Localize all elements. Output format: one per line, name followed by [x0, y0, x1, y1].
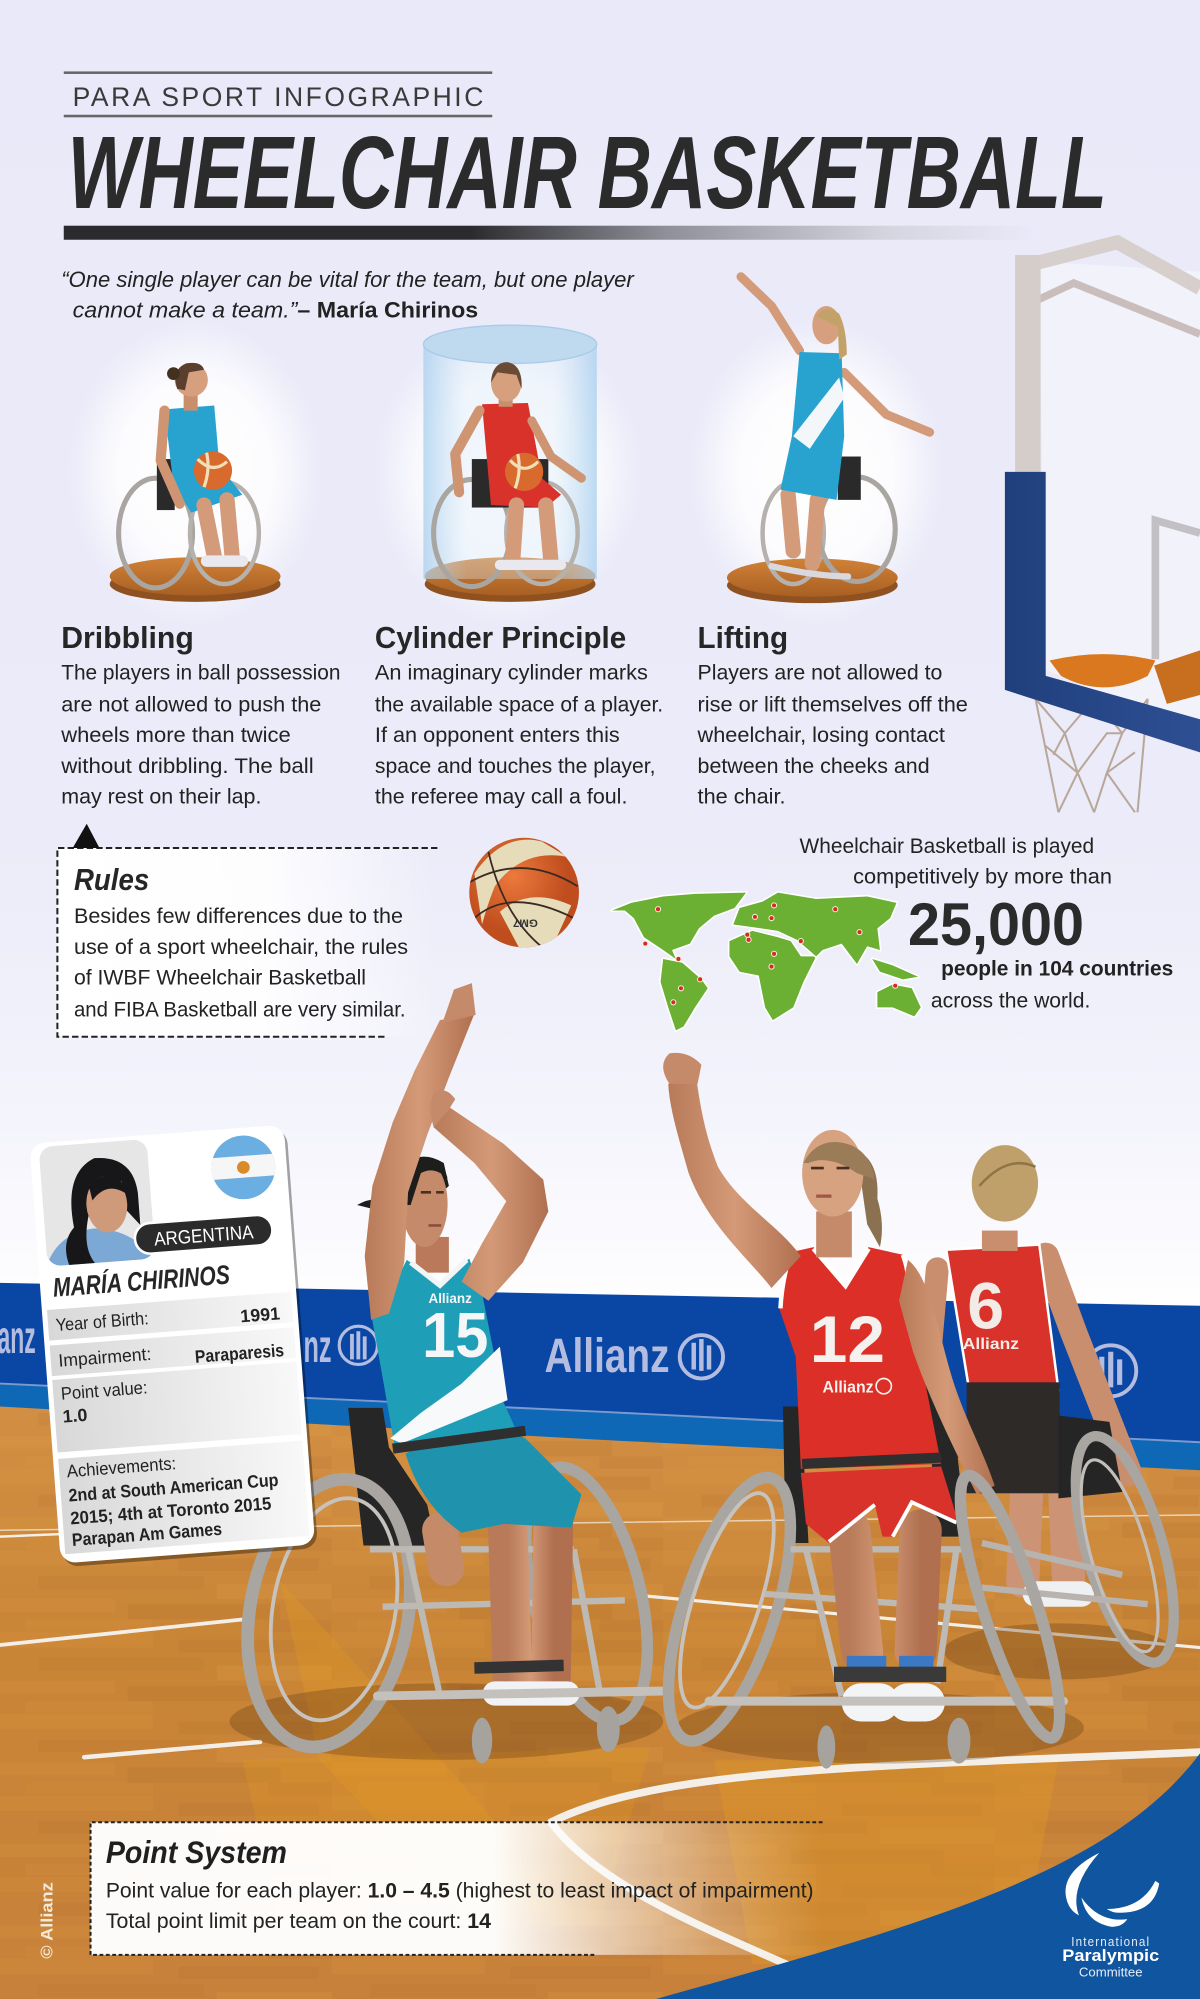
- player 12 red: Allianz: [823, 1378, 874, 1397]
- sponsor banner: Allianz: [545, 1329, 670, 1383]
- player 6 back view: 6: [967, 1270, 1004, 1344]
- profile rows: 1991: [240, 1303, 281, 1326]
- logo: International Paralympic Committee: International: [1071, 1934, 1150, 1949]
- player 15 teal: Allianz: [428, 1290, 472, 1306]
- statistics callout: [800, 833, 1173, 1012]
- quote: [61, 267, 635, 323]
- profile rows: Parapan Am Games: [71, 1519, 223, 1550]
- player 15 teal: [228, 983, 670, 1764]
- player 12 red: [643, 1053, 1084, 1769]
- heading: dribbling: Dribbling: [61, 621, 194, 655]
- logo: International Paralympic Committee: Committee: [1079, 1965, 1143, 1980]
- text: lifting: wheelchair, losing contact: [697, 722, 945, 747]
- basketball hoop and backboard: [1005, 242, 1200, 812]
- figure: dribbling player: [68, 319, 323, 625]
- profile rows: Point value:: [60, 1377, 148, 1404]
- player 6 back view: [928, 1145, 1194, 1679]
- text: dribbling: are not allowed to push the: [61, 692, 321, 717]
- profile rows: 1.0: [62, 1405, 88, 1427]
- player 6 back view: Allianz: [963, 1336, 1019, 1353]
- athlete photo: [40, 1140, 153, 1266]
- card: athlete profile: [29, 1125, 318, 1567]
- panel: rules: of IWBF Wheelchair Basketball: [74, 964, 366, 989]
- figure: lifting player: [689, 277, 944, 625]
- text: lifting: the chair.: [698, 783, 786, 808]
- statistics callout: competitively by more than: [853, 864, 1112, 889]
- profile rows: Achievements:: [66, 1453, 177, 1481]
- figure: cylinder player: [374, 319, 641, 625]
- panel: rules: use of a sport wheelchair, the rules: [74, 934, 408, 959]
- country pill: [134, 1214, 273, 1255]
- text: cylinder principle: the available space of a player.: [375, 692, 663, 717]
- profile rows: [47, 1292, 309, 1554]
- text: cylinder principle: the referee may call a foul.: [375, 783, 627, 808]
- text: dribbling: wheels more than twice: [60, 722, 291, 747]
- text: dribbling: without dribbling. The ball: [60, 753, 314, 778]
- country pill: ARGENTINA: [153, 1222, 254, 1251]
- copyright: © Allianz: [37, 1882, 56, 1959]
- text: dribbling: The players in ball possession: [61, 660, 340, 685]
- profile rows: 2nd at South American Cup: [68, 1470, 279, 1505]
- profile rows: 2015; 4th at Toronto 2015: [70, 1493, 272, 1528]
- panel: rules: Rules: [74, 863, 149, 897]
- statistics callout: across the world.: [931, 987, 1090, 1012]
- player 12 red: 12: [810, 1303, 885, 1377]
- logo: International Paralympic Committee: [1062, 1853, 1159, 1980]
- text: cylinder principle: [375, 660, 663, 808]
- statistics callout: Wheelchair Basketball is played: [800, 833, 1094, 858]
- profile rows: Paraparesis: [194, 1340, 285, 1367]
- panel: rules: [57, 824, 437, 1037]
- sponsor banner: [0, 1283, 1200, 1470]
- logo: International Paralympic Committee: Paralympic: [1062, 1946, 1159, 1965]
- sponsor banner: nz: [304, 1320, 332, 1372]
- text: lifting: rise or lift themselves off the: [698, 692, 968, 717]
- text: dribbling: [60, 660, 340, 808]
- heading: lifting: Lifting: [698, 621, 788, 655]
- panel: point system: Point System: [106, 1834, 287, 1870]
- icon: basketball: [469, 838, 579, 950]
- panel: point system: [91, 1822, 823, 1955]
- quote: “One single player can be vital for the team, but one player: [61, 267, 635, 292]
- text: lifting: [697, 660, 968, 808]
- quote: cannot make a team.” – María Chirinos: [73, 298, 478, 323]
- text: lifting: between the cheeks and: [698, 753, 930, 778]
- blue corner: [654, 1753, 1200, 1999]
- court floor: [0, 1403, 1200, 1999]
- panel: point system: Total point limit per team on the court: 14: [106, 1908, 491, 1933]
- text: cylinder principle: If an opponent enters this: [375, 722, 620, 747]
- flag: Argentina: [212, 1136, 276, 1200]
- statistics callout: 25,000: [908, 891, 1084, 958]
- panel: rules: and FIBA Basketball are very similar.: [74, 996, 406, 1021]
- heading: cylinder principle: Cylinder Principle: [375, 621, 626, 655]
- kicker heading: PARA SPORT INFOGRAPHIC: [73, 82, 486, 112]
- title gradient bar: [64, 226, 1033, 240]
- text: dribbling: may rest on their lap.: [61, 783, 261, 808]
- icon: basketball: GM7: [513, 916, 538, 928]
- world map: [612, 893, 921, 1030]
- panel: point system: Point value for each player: 1.0 – 4.5 (highest to least impact of impairment): [106, 1877, 814, 1902]
- text: cylinder principle: An imaginary cylinder marks: [375, 660, 648, 685]
- athlete name: MARÍA CHIRINOS: [52, 1259, 231, 1303]
- profile rows: Year of Birth:: [55, 1308, 149, 1335]
- text: lifting: Players are not allowed to: [698, 660, 942, 685]
- player 15 teal: 15: [422, 1299, 488, 1371]
- profile rows: Impairment:: [58, 1344, 152, 1371]
- statistics callout: people in 104 countries: [941, 956, 1173, 981]
- text: cylinder principle: space and touches the player,: [375, 753, 655, 778]
- panel: rules: Besides few differences due to the: [74, 903, 403, 928]
